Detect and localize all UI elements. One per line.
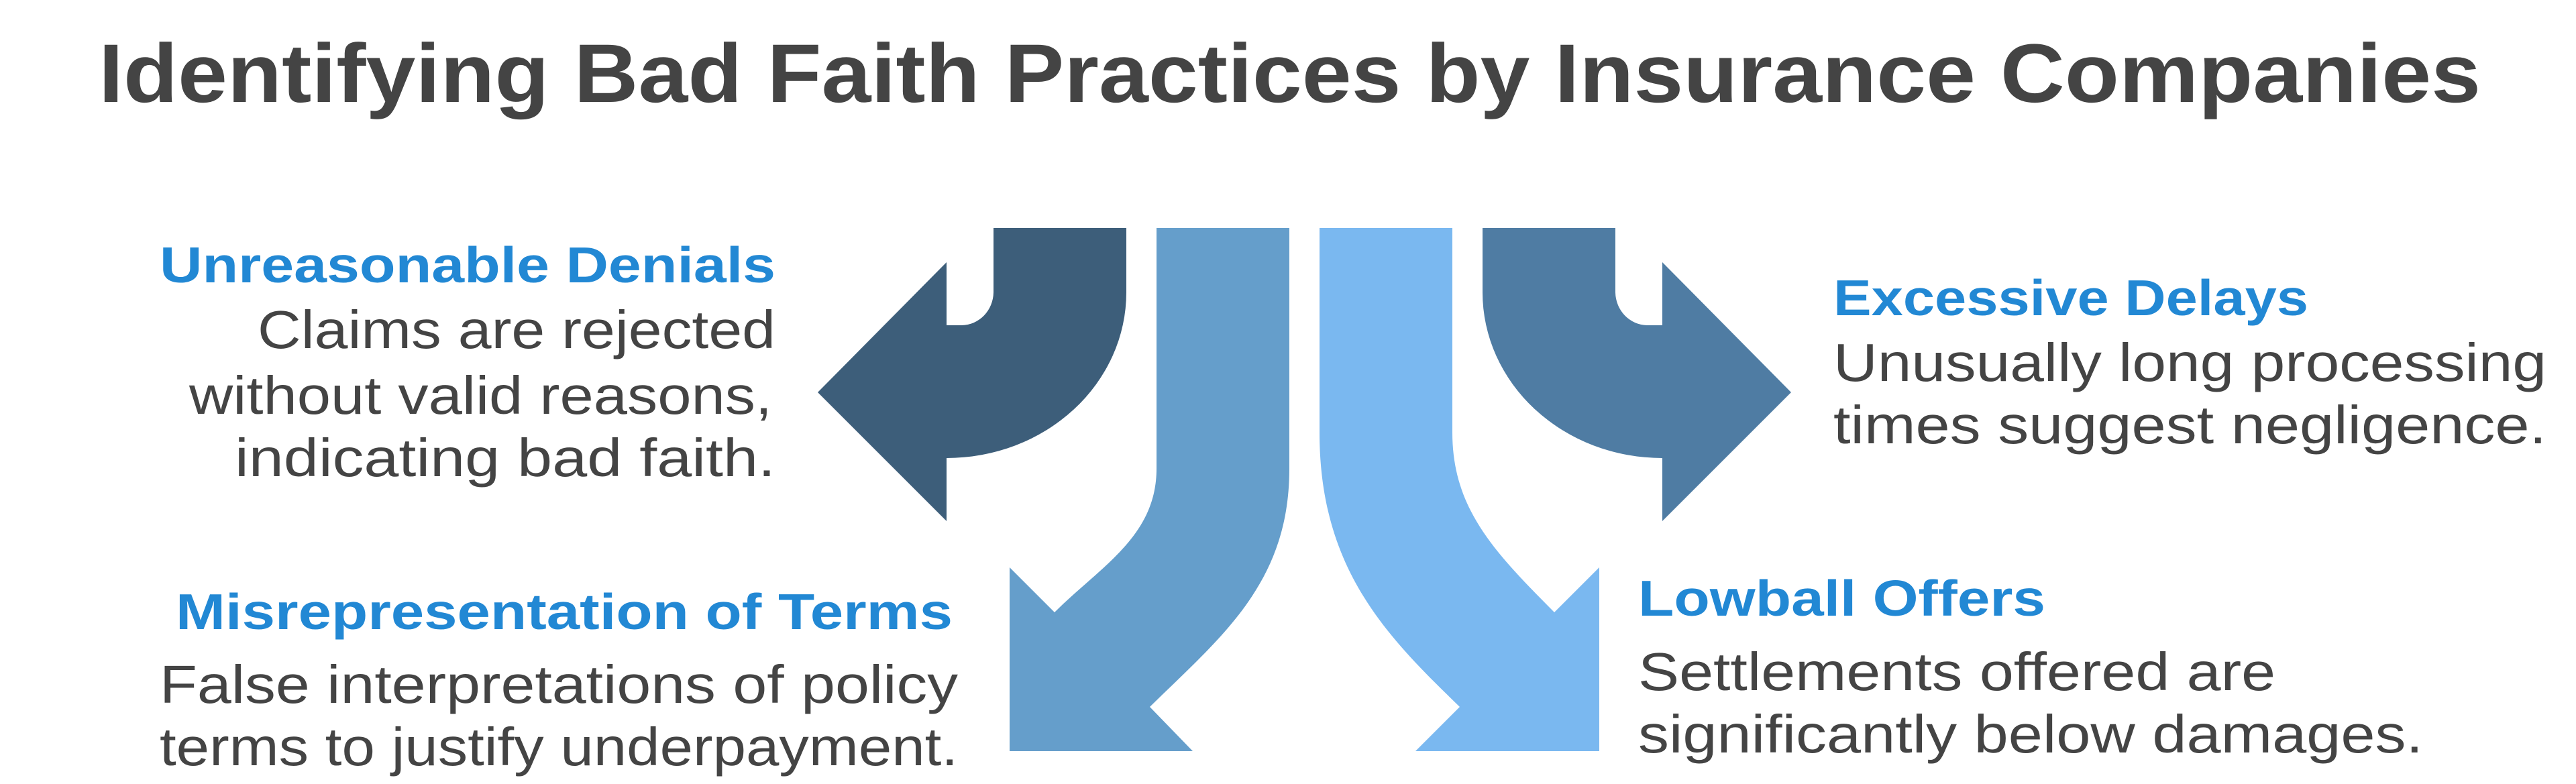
- text: excessive delays: [1833, 270, 2546, 455]
- text: misrepresentation of terms: [160, 583, 958, 777]
- text: lowball offers: Settlements offered are: [1638, 642, 2275, 702]
- text: unreasonable denials: without valid reasons,: [189, 366, 772, 425]
- arrow: misrepresentation of terms (down-left): [1010, 228, 1289, 751]
- title: Identifying Bad Faith Practices by Insurance Companies: [99, 27, 2481, 120]
- text: lowball offers: significantly below damages.: [1638, 704, 2423, 764]
- text: misrepresentation of terms: Misrepresentation of Terms: [176, 583, 953, 640]
- text: lowball offers: [1638, 570, 2423, 764]
- text: excessive delays: Excessive Delays: [1833, 270, 2308, 326]
- text: unreasonable denials: [160, 237, 775, 488]
- text: excessive delays: Unusually long processing: [1833, 333, 2546, 392]
- text: misrepresentation of terms: False interpretations of policy: [160, 655, 958, 714]
- text: lowball offers: Lowball Offers: [1638, 570, 2045, 626]
- text: unreasonable denials: Unreasonable Denials: [160, 237, 775, 293]
- arrow: excessive delays (right turn): [1483, 228, 1791, 521]
- text: unreasonable denials: Claims are rejected: [258, 300, 775, 359]
- text: misrepresentation of terms: terms to justify underpayment.: [160, 717, 958, 777]
- text: unreasonable denials: indicating bad faith.: [235, 428, 775, 488]
- arrow: lowball offers (down-right): [1320, 228, 1599, 751]
- text: excessive delays: times suggest negligence.: [1833, 395, 2546, 455]
- arrow: unreasonable denials (dark, left turn): [818, 228, 1126, 521]
